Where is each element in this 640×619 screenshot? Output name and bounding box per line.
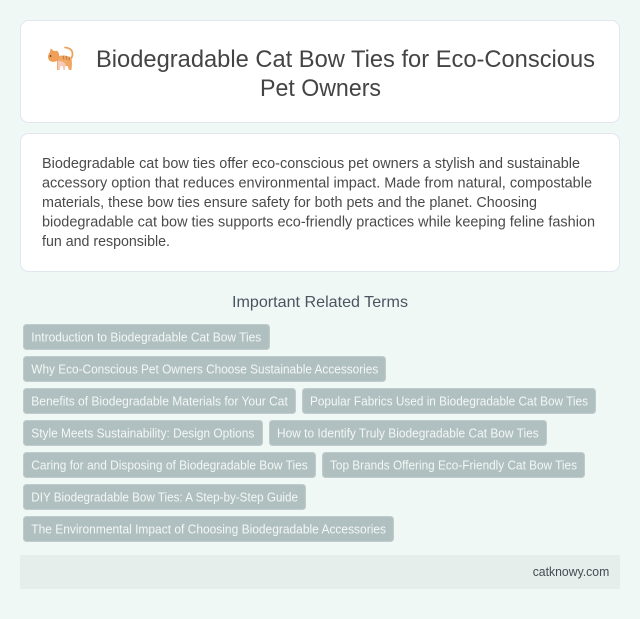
tag: brands [322,452,584,478]
tag: why choose: Why Eco-Conscious Pet Owners Choose Sustainable Accessories [31,362,378,376]
tag: style: Style Meets Sustainability: Design Options [31,426,254,440]
tag: introduction [24,324,270,350]
panel: title card [20,20,620,122]
tag: benefits: Benefits of Biodegradable Materials for Your Cat [31,394,288,408]
tag: brands: Top Brands Offering Eco-Friendly Cat Bow Ties [330,458,577,472]
tag: caring: Caring for and Disposing of Biodegradable Bow Ties [31,458,308,472]
text block: description: accessory option that reduces environmental impact. Made from natural, compostable [42,174,592,192]
tag list [24,324,596,542]
text block: description [42,155,595,250]
tag: fabrics [302,388,596,414]
tag: caring [24,452,316,478]
text block: description: Biodegradable cat bow ties offer eco-conscious pet owners a stylish and sustainable [42,155,580,172]
tag: identify: How to Identify Truly Biodegradable Cat Bow Ties [277,426,539,440]
panel: intro description [20,134,620,272]
tag: identify [270,420,546,446]
footer: catknowy.com [533,565,609,579]
text block: description: materials, these bow ties ensure safety for both pets and the planet. Choosing [42,194,537,211]
tag: style [24,420,262,446]
title: Biodegradable Cat Bow Ties for Eco-Conscious [96,46,595,73]
tag: environmental impact: The Environmental Impact of Choosing Biodegradable Accessories [31,522,386,536]
tag: diy: DIY Biodegradable Bow Ties: A Step-by-Step Guide [31,490,298,504]
tag: why choose [24,356,386,382]
title: Pet Owners [260,75,381,102]
tag: diy [24,484,306,510]
icon: cat [48,48,73,70]
tag: environmental impact [24,516,394,542]
text block: description: fun and responsible. [42,233,170,250]
text block: description: biodegradable cat bow ties supports eco-friendly practices while keeping feline fashion [42,214,595,230]
tag: fabrics: Popular Fabrics Used in Biodegradable Cat Bow Ties [310,394,588,408]
footer [20,555,620,589]
heading: related terms: Important Related Terms [232,294,408,311]
title [96,46,595,102]
tag: benefits [24,388,296,414]
tag: introduction: Introduction to Biodegradable Cat Bow Ties [31,330,261,344]
